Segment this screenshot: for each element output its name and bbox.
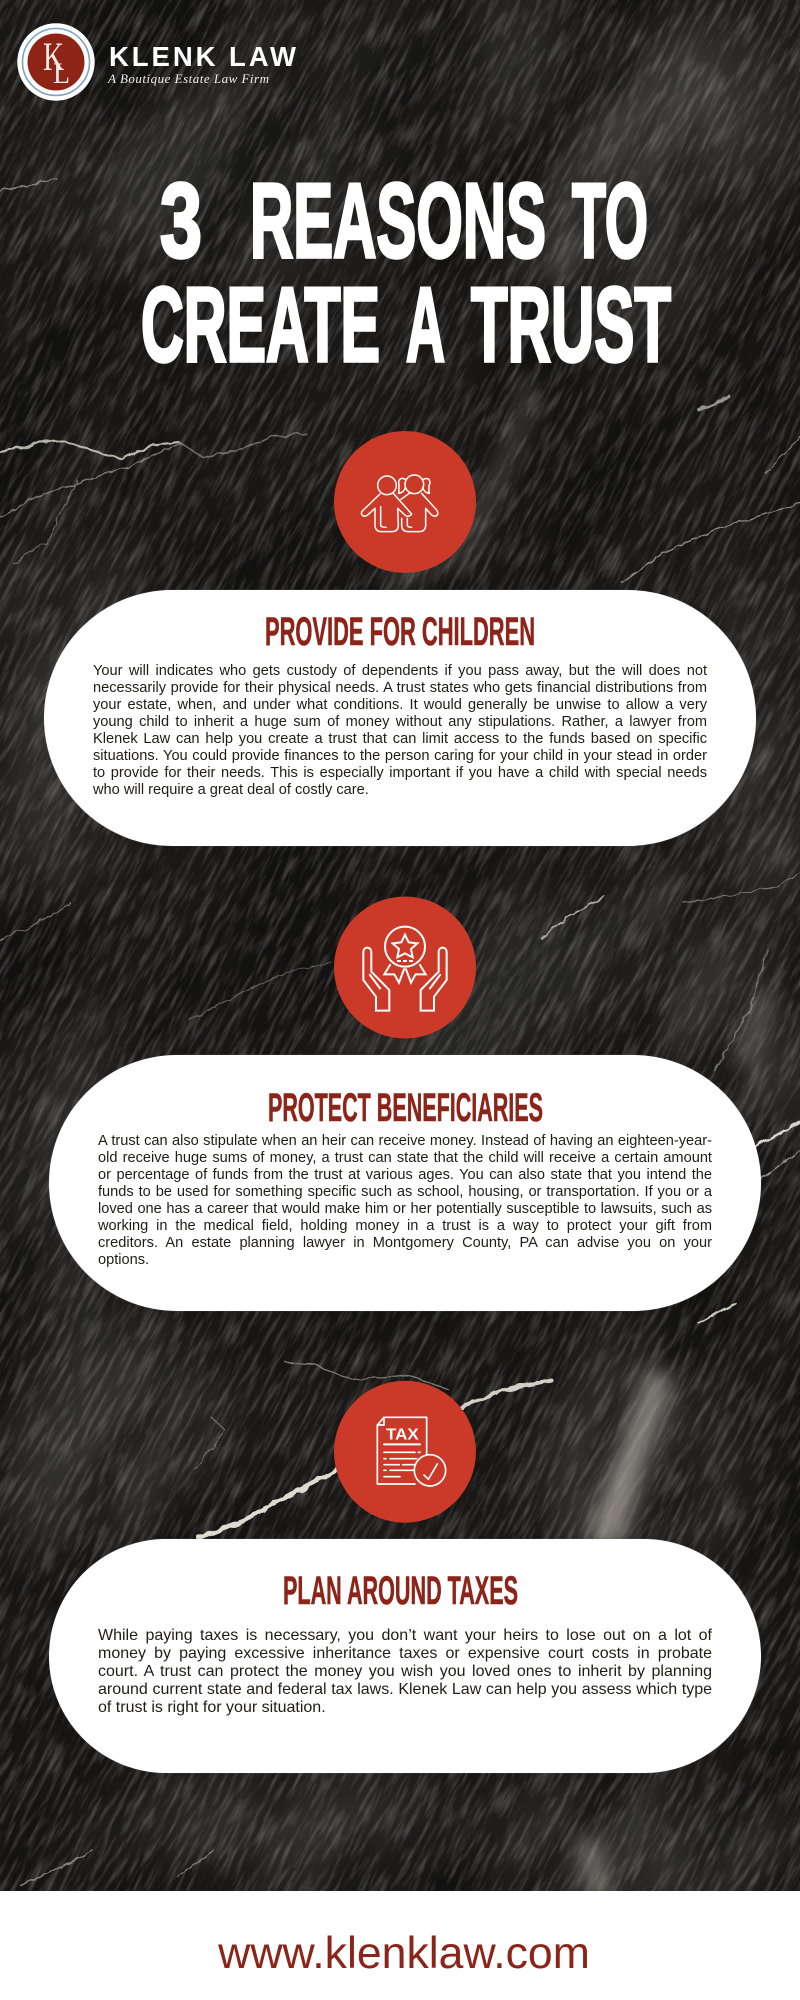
website url: www.klenklaw.com [218,1929,590,1978]
text: provide for children: young child to inherit a huge sum of money without any stipulations. Rather, a lawyer from [93,714,707,730]
title: CREATE [141,266,380,384]
icon: tax document in red circle: TAX [386,1426,419,1443]
logo badge [17,23,95,101]
text: provide for children: who will require a great deal of costly care. [93,782,369,798]
logo badge: L [53,57,70,90]
text: protect beneficiaries: creditors. An estate planning lawyer in Montgomery County, PA can advise you on your [98,1234,712,1250]
footer band with website [0,1891,800,2000]
heading: protect beneficiaries: PROTECT BENEFICIARIES [268,1086,543,1130]
text: provide for children: Klenek Law can help you create a trust that can limit access to the funds based on specific [93,730,707,746]
panel: plan around taxes [49,1539,761,1773]
title: TO [572,162,648,280]
text: plan around taxes: of trust is right for your situation. [98,1698,326,1716]
text: provide for children: your estate, when, and under what conditions. It would generally be unwise to allow a very [93,696,707,712]
logo: Klenk Law [17,23,296,101]
text: provide for children: necessarily provide for their physical needs. A trust states who gets financial distributions from [93,680,707,696]
title: 3 [160,162,202,280]
logo badge: K [43,34,64,79]
text: protect beneficiaries [98,1132,712,1268]
text: provide for children: Your will indicates who gets custody of dependents if you pass away, but the will does not [93,662,707,678]
panel: protect beneficiaries [49,1055,761,1311]
title: A [406,266,445,384]
text: protect beneficiaries: options. [98,1252,149,1268]
text: protect beneficiaries: loved one has a career that would make him or her potentially susceptible to lawsuits, such as [98,1200,712,1216]
title: REASONS [250,162,546,280]
heading: provide for children: PROVIDE FOR CHILDREN [265,610,535,654]
text: protect beneficiaries: old receive huge sums of money, a trust can state that the child will receive a certain amount [98,1150,712,1166]
icon: children in red circle [334,431,476,573]
text: plan around taxes: court. A trust can protect the money you wish you loved ones to inherit by planning [98,1662,712,1680]
text: protect beneficiaries: A trust can also stipulate when an heir can receive money. Instead of having an eighteen-year- [98,1132,712,1148]
text: plan around taxes: money by paying excessive inheritance taxes or expensive court costs in probate [98,1644,712,1662]
logo tagline: A Boutique Estate Law Firm [107,71,269,86]
text: provide for children [93,662,707,798]
text: provide for children: to provide for their needs. This is especially important if you have a child with special needs [93,764,707,780]
text: plan around taxes: While paying taxes is necessary, you don’t want your heirs to lose out on a lot of [98,1626,712,1644]
text: protect beneficiaries: funds to be used for something specific such as school, housing, or transportation. If you or a [98,1184,712,1200]
panel: provide for children [44,590,756,846]
text: plan around taxes [98,1626,712,1716]
text: protect beneficiaries: working in the medical field, holding money in a trust is a way to protect your gift from [98,1218,712,1234]
icon: tax document in red circle [334,1380,476,1523]
text: plan around taxes: around current state and federal tax laws. Klenek Law can help you assess which type [98,1680,712,1698]
logo wordmark: KLENK LAW [109,41,296,72]
title [48,162,761,1773]
icon: medal and hands in red circle [334,896,476,1038]
text: protect beneficiaries: or percentage of funds from the trust at various ages. You can also state that you intend the [98,1166,712,1182]
text: provide for children: situations. You could provide finances to the person caring for your child in your stead in order [93,748,707,764]
